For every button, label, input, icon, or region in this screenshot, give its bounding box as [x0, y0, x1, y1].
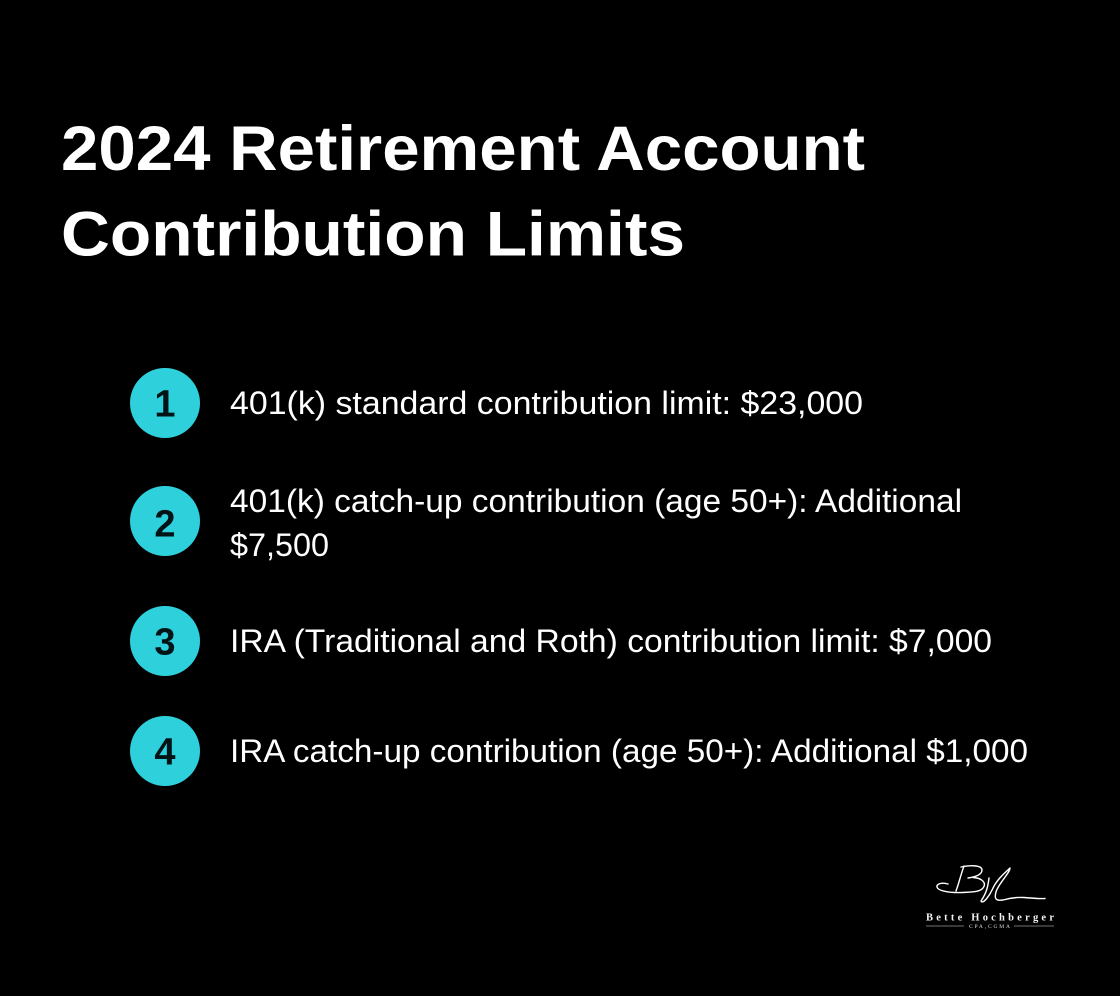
- list item 2: [130, 483, 962, 563]
- number badge 2: 2: [154, 504, 176, 546]
- number badge 3: [130, 606, 200, 676]
- item 4 text: IRA catch-up contribution (age 50+): Additional $1,000: [230, 733, 1028, 769]
- list item 4: [130, 716, 1028, 786]
- logo name: Bette Hochberger: [926, 912, 1054, 924]
- logo: Bette Hochberger signature: [926, 866, 1054, 930]
- number badge 4: [130, 716, 200, 786]
- title: Contribution Limits: [61, 200, 685, 270]
- item 2 text: 401(k) catch-up contribution (age 50+): Additional: [230, 483, 962, 519]
- number badge 4: 4: [154, 732, 176, 774]
- number badge 1: 1: [154, 384, 176, 426]
- item 1 text: 401(k) standard contribution limit: $23,000: [230, 385, 863, 421]
- item 2 text: $7,500: [230, 527, 329, 563]
- title: 2024 Retirement Account: [61, 114, 865, 184]
- list item 1: [130, 368, 863, 438]
- title: [61, 114, 865, 270]
- signature monogram: [937, 866, 1045, 902]
- number badge 1: [130, 368, 200, 438]
- item 2 text: [230, 483, 962, 563]
- item 3 text: IRA (Traditional and Roth) contribution limit: $7,000: [230, 623, 992, 659]
- logo rules: [926, 925, 1054, 927]
- logo credentials: CPA,CGMA: [969, 924, 1010, 930]
- list item 3: [130, 606, 992, 676]
- number badge 3: 3: [154, 622, 176, 664]
- number badge 2: [130, 486, 200, 556]
